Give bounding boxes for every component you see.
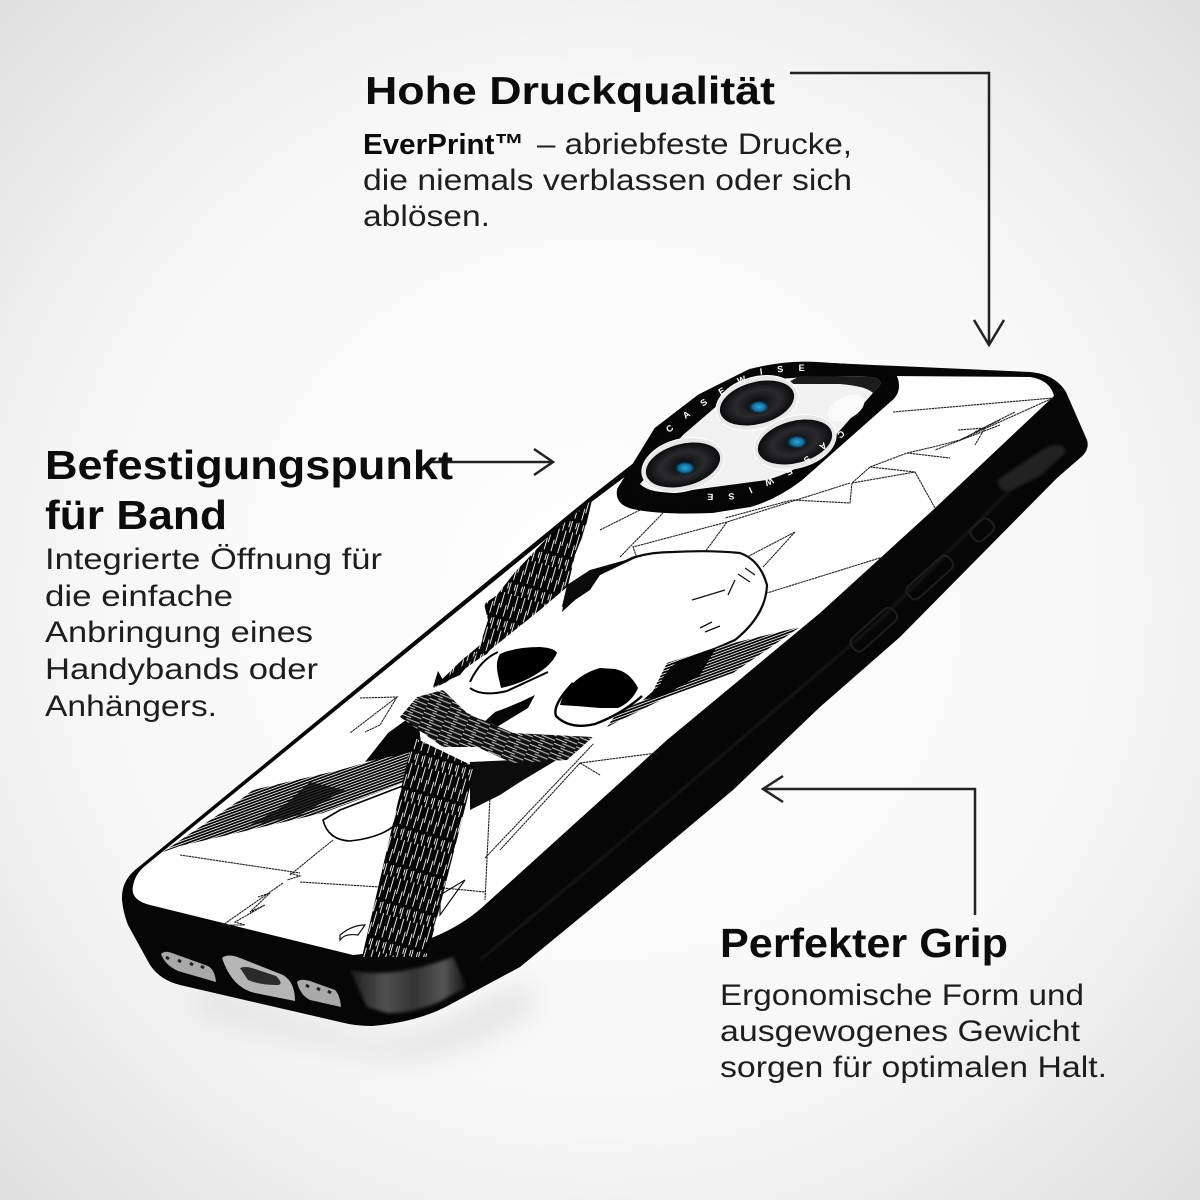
arrow: grip: [763, 776, 975, 915]
body: Anhängers.: [45, 690, 217, 723]
left wedge: [562, 556, 640, 612]
drop shadow: [190, 985, 540, 1056]
printed back surface: [133, 375, 1054, 955]
body: die einfache: [45, 580, 233, 613]
arrow: strap attachment: [430, 449, 553, 475]
spider web lines: [180, 398, 1053, 927]
body: – abriebfeste Drucke,: [537, 128, 852, 161]
body: [363, 128, 852, 233]
body: EverPrint™: [363, 129, 524, 161]
dark patch behind scarf: [365, 712, 422, 762]
phone case with skull print: [122, 362, 1088, 1061]
side buttons: [848, 516, 997, 654]
heading: für Band: [45, 492, 227, 538]
arrow: print quality: [790, 73, 1004, 345]
heading: Befestigungspunkt: [45, 442, 453, 488]
casewise lettering: CASEWISE: [666, 364, 804, 432]
bottom ports: [161, 952, 341, 1007]
body: Ergonomische Form und: [720, 979, 1084, 1012]
lower right feathers: [470, 758, 560, 810]
lens top: [710, 367, 804, 439]
camera module: [616, 362, 899, 514]
casewise lettering: [666, 364, 844, 500]
left hatched bone: [163, 750, 410, 852]
scarf: [400, 690, 593, 763]
eye socket left: [497, 647, 557, 688]
dark left hatch fill: [248, 782, 345, 826]
casewise lettering: CASEWISE: [708, 431, 844, 500]
heading: [45, 442, 453, 538]
eye socket right: [560, 668, 638, 708]
case body: [122, 363, 1088, 1026]
lens right: [748, 406, 842, 478]
body: Handybands oder: [45, 653, 318, 686]
nose: [483, 695, 535, 727]
body: [720, 979, 1107, 1084]
side highlights: [350, 445, 1066, 1013]
cranium shading marks: [692, 568, 755, 632]
dark right fill: [643, 648, 716, 700]
flash: [823, 389, 869, 427]
eye arc left: [470, 652, 548, 693]
callout: grip: [720, 920, 1107, 1084]
body: sorgen für optimalen Halt.: [720, 1051, 1107, 1084]
jaw fragment: [323, 785, 405, 841]
upper left bone: [433, 500, 592, 688]
body: ausgewogenes Gewicht: [720, 1015, 1081, 1048]
skull cranium: [455, 552, 768, 745]
heading: Hohe Druckqualität: [365, 70, 775, 113]
bone tuft: [433, 650, 480, 687]
lens left: [636, 429, 730, 501]
camera glass: [640, 376, 880, 492]
callout: strap attachment: [45, 442, 453, 723]
right hatched bone: [607, 627, 800, 727]
body: [45, 543, 382, 723]
cranium top outline: [563, 551, 767, 650]
heading: Perfekter Grip: [720, 920, 1008, 966]
eye outline right: [555, 683, 642, 726]
body: Integrierte Öffnung für: [45, 543, 382, 576]
small feather marks: [340, 880, 465, 940]
camera inner rim: [785, 376, 880, 393]
callout: print quality: [363, 70, 852, 233]
body: Anbringung eines: [45, 616, 313, 649]
vertical bone: [362, 737, 475, 957]
body: ablösen.: [363, 200, 490, 233]
body: die niemals verblassen oder sich: [363, 164, 852, 197]
